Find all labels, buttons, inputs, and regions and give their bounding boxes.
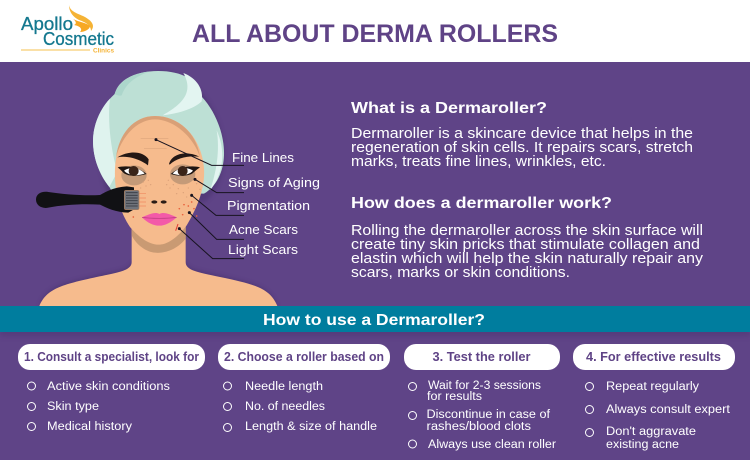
- acne scars: [132, 201, 197, 218]
- logo: Apollo Cosmetic Clinics: Apollo: [21, 14, 73, 34]
- step 3: test the roller: Always use clean roller: [428, 439, 556, 451]
- section: how does a dermaroller work: How does a dermaroller work?: [351, 195, 612, 212]
- neck and shoulders: [39, 222, 277, 306]
- title: ALL ABOUT DERMA ROLLERS: [192, 20, 558, 48]
- step 1: consult a specialist: Medical history: [47, 421, 132, 433]
- logo: Apollo Cosmetic Clinics: Cosmetic: [43, 29, 114, 49]
- leader lines: [156, 140, 244, 259]
- step 4: for effective results: [573, 344, 735, 451]
- step 4: for effective results: Repeat regularly: [606, 381, 699, 393]
- step 1: consult a specialist: [18, 344, 205, 433]
- needle marks on cheek: [139, 194, 146, 206]
- step 3: test the roller: Discontinue in case of: [426, 409, 551, 421]
- pigmentation dots: [140, 180, 201, 198]
- step 2: choose a roller: Needle length: [245, 381, 323, 393]
- teal band: how to use: [0, 306, 750, 332]
- step 4: for effective results: existing acne: [606, 439, 679, 451]
- section: what is a dermaroller: marks, treats fine lines, wrinkles, etc.: [351, 154, 606, 170]
- step 1: consult a specialist: 1. Consult a specialist, look for: [24, 350, 199, 364]
- logo: Apollo Cosmetic Clinics: Clinics: [93, 48, 114, 54]
- step 1: consult a specialist: Active skin conditions: [47, 381, 170, 393]
- step 2: choose a roller: Length & size of handle: [245, 421, 377, 433]
- step 2: choose a roller: 2. Choose a roller based on: [224, 350, 384, 364]
- face: [115, 116, 204, 245]
- illustration: woman with towel and dermaroller: [36, 71, 277, 306]
- lips: [142, 213, 177, 226]
- step 4: for effective results: Always consult expert: [606, 404, 731, 416]
- step 2: choose a roller: No. of needles: [245, 401, 325, 413]
- section: how does a dermaroller work: create tiny skin pricks that stimulate collagen and: [351, 237, 700, 253]
- section: how does a dermaroller work: Rolling the dermaroller across the skin surface will: [351, 223, 703, 239]
- towel: [93, 71, 224, 194]
- step 3: test the roller: rashes/blood clots: [426, 421, 531, 433]
- nose: [151, 200, 157, 204]
- step 3: test the roller: 3. Test the roller: [432, 350, 531, 364]
- dermaroller: [36, 186, 134, 213]
- section: what is a dermaroller: regeneration of skin cells. It repairs scars, stretch: [351, 140, 693, 156]
- eyes: [118, 166, 147, 176]
- forehead lines: [141, 138, 168, 149]
- step 4: for effective results: Don't aggravate: [606, 426, 696, 438]
- face callout labels: [227, 150, 320, 257]
- teal band: how to use: How to use a Dermaroller?: [263, 312, 485, 329]
- section: what is a dermaroller: [351, 100, 693, 170]
- step 2: choose a roller: [218, 344, 390, 433]
- section: how does a dermaroller work: scars, marks or skin conditions.: [351, 265, 570, 281]
- section: how does a dermaroller work: [351, 195, 704, 281]
- step 3: test the roller: [404, 344, 560, 451]
- section: what is a dermaroller: Dermaroller is a skincare device that helps in the: [351, 126, 693, 142]
- face callout labels: Signs of Aging: [228, 175, 320, 190]
- step 3: test the roller: for results: [427, 391, 482, 403]
- section: what is a dermaroller: What is a Dermaroller?: [351, 100, 547, 117]
- band shadow: [0, 328, 750, 336]
- face callout labels: Fine Lines: [232, 150, 295, 165]
- logo: Apollo Cosmetic Clinics: [21, 5, 114, 54]
- face callout labels: Light Scars: [228, 242, 299, 257]
- step 3: test the roller: Wait for 2-3 sessions: [428, 380, 541, 392]
- face callout labels: Acne Scars: [229, 222, 299, 237]
- eyebrows: [117, 153, 149, 165]
- step 1: consult a specialist: Skin type: [47, 401, 99, 413]
- section: how does a dermaroller work: elastin which will help the skin naturally repair any: [351, 251, 704, 267]
- step 4: for effective results: 4. For effective results: [586, 350, 721, 364]
- eye shadows: [121, 165, 147, 185]
- face callout labels: Pigmentation: [227, 198, 310, 213]
- light scar: [176, 224, 178, 231]
